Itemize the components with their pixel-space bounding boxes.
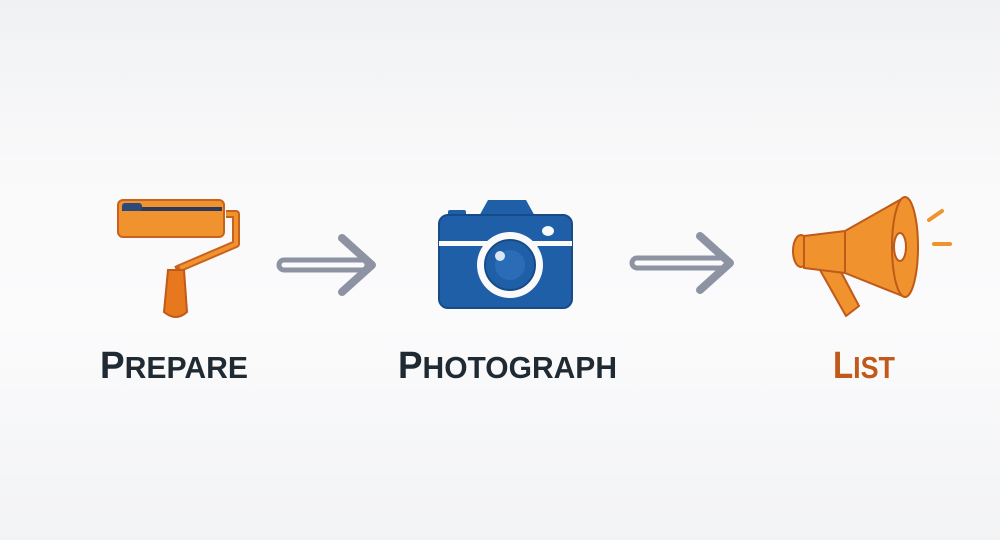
icon: camera bbox=[439, 200, 572, 308]
label: List: LIST bbox=[833, 345, 895, 387]
icon: paint roller bbox=[118, 200, 236, 317]
label: Photograph: PHOTOGRAPH bbox=[398, 345, 617, 387]
icon: megaphone bbox=[793, 197, 950, 316]
arrow 2 bbox=[637, 236, 730, 290]
label: Prepare: PREPARE bbox=[100, 345, 248, 387]
arrow 1 bbox=[284, 238, 372, 292]
